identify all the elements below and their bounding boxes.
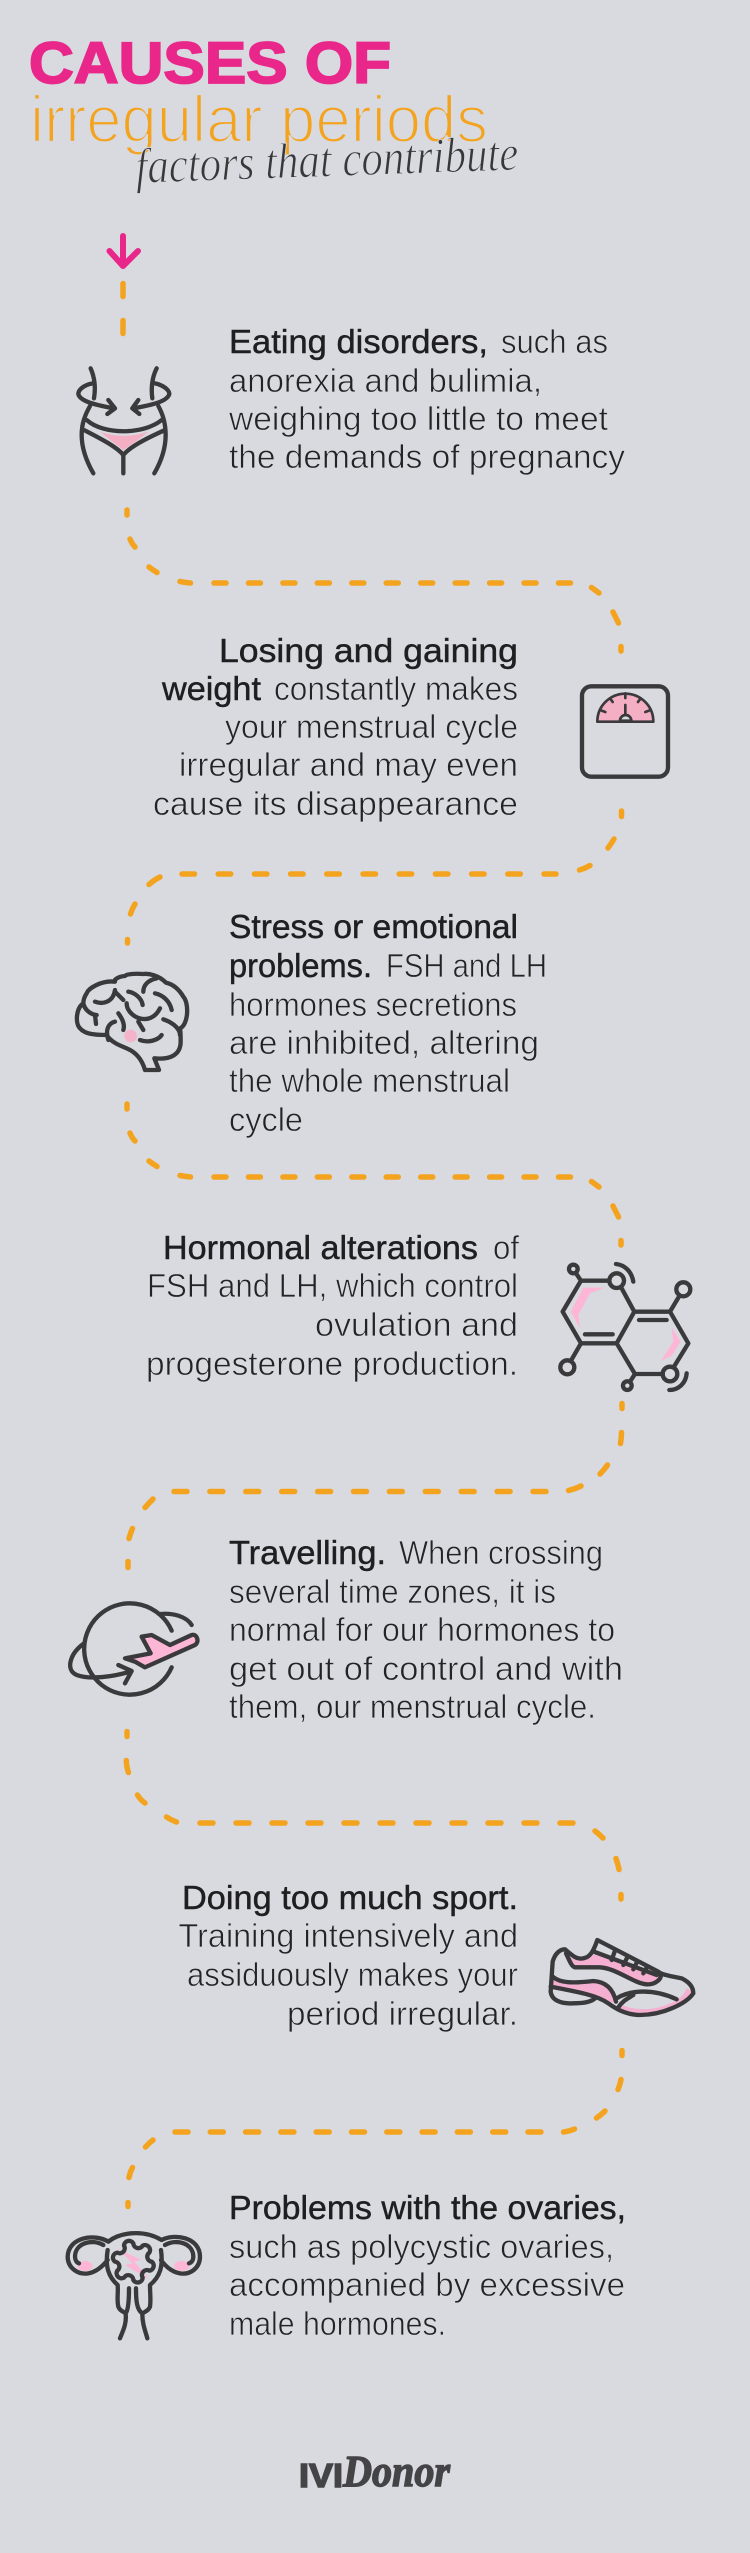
text block: hormonal alterations: of <box>493 1229 520 1266</box>
text block: travelling <box>229 1534 623 1725</box>
text block: stress or emotional problems <box>229 908 547 1138</box>
icon: brain <box>77 974 187 1070</box>
text block: doing too much sport: period irregular. <box>287 1995 518 2032</box>
text block: doing too much sport: Training intensively and <box>178 1917 518 1954</box>
heading: irregular periods: irregular periods <box>30 82 488 156</box>
icon: waist measurement <box>78 368 169 473</box>
text block: eating disorders: weighing too little to meet <box>228 400 608 437</box>
text block: problems with the ovaries: such as polycystic ovaries, <box>229 2228 614 2265</box>
text block: losing and gaining weight: cause its disappearance <box>153 785 518 822</box>
text block: travelling: When crossing <box>399 1534 603 1571</box>
icon: hormone molecule <box>560 1264 690 1390</box>
logo: IVI Donor: IVI <box>299 2457 343 2494</box>
text block: losing and gaining weight: irregular and may even <box>179 746 518 783</box>
text block: stress or emotional problems: cycle <box>229 1101 303 1138</box>
text block: eating disorders: Eating disorders, <box>229 323 488 360</box>
logo: IVI Donor: Donor <box>342 2447 451 2496</box>
text block: stress or emotional problems: problems. <box>229 947 372 984</box>
text block: problems with the ovaries: male hormones. <box>229 2305 446 2342</box>
text block: travelling: several time zones, it is <box>229 1573 556 1610</box>
text block: travelling: normal for our hormones to <box>229 1611 615 1648</box>
icon: running shoe <box>551 1940 693 2015</box>
text block: hormonal alterations <box>146 1229 520 1382</box>
text block: doing too much sport: Doing too much sport. <box>182 1879 518 1916</box>
text block: stress or emotional problems: FSH and LH <box>386 947 547 984</box>
title block <box>29 31 519 194</box>
logo: IVI Donor <box>299 2447 451 2496</box>
icon: bathroom scale <box>582 686 668 777</box>
text block: eating disorders: the demands of pregnancy <box>229 438 626 475</box>
text block: eating disorders: such as <box>501 323 608 360</box>
text block: problems with the ovaries <box>229 2189 626 2342</box>
arrow: start pointer <box>110 236 138 266</box>
text block: losing and gaining weight: weight <box>161 670 261 707</box>
text block: hormonal alterations: ovulation and <box>315 1306 518 1343</box>
dashed path: connector 2 <box>128 811 622 943</box>
text block: losing and gaining weight: Losing and gaining <box>219 632 518 669</box>
subtitle: factors that contribute: factors that contribute <box>134 125 519 194</box>
text block: losing and gaining weight: your menstrual cycle <box>225 708 518 745</box>
icon: plane around globe <box>70 1603 197 1695</box>
text block: hormonal alterations: progesterone production. <box>146 1345 518 1382</box>
dashed path: connector 4 <box>128 1404 622 1568</box>
text block: travelling: them, our menstrual cycle. <box>229 1688 596 1725</box>
dashed path: connector 6 <box>128 2050 622 2206</box>
dashed path: top segment <box>120 284 126 334</box>
text block: travelling: Travelling. <box>229 1534 386 1571</box>
heading: causes of: CAUSES OF <box>29 31 391 96</box>
text block: losing and gaining weight <box>153 632 518 822</box>
text block: losing and gaining weight: constantly makes <box>274 670 518 707</box>
text block: stress or emotional problems: the whole menstrual <box>229 1062 510 1099</box>
text block: eating disorders: anorexia and bulimia, <box>229 362 542 399</box>
text block: stress or emotional problems: hormones secretions <box>229 986 517 1023</box>
text block: eating disorders <box>228 323 626 475</box>
text block: problems with the ovaries: Problems with the ovaries, <box>229 2189 626 2226</box>
text block: doing too much sport: assiduously makes your <box>187 1956 518 1993</box>
text block: hormonal alterations: Hormonal alterations <box>163 1229 478 1266</box>
text block: stress or emotional problems: are inhibited, altering <box>229 1024 539 1061</box>
text block: stress or emotional problems: Stress or emotional <box>229 908 518 945</box>
dashed path: connector 5 <box>126 1732 621 1899</box>
text block: hormonal alterations: FSH and LH, which control <box>147 1267 518 1304</box>
icon: uterus and ovaries <box>68 2233 200 2338</box>
text block: problems with the ovaries: accompanied by excessive <box>229 2266 625 2303</box>
text block: doing too much sport <box>178 1879 518 2032</box>
text block: travelling: get out of control and with <box>229 1650 623 1687</box>
dashed path: connector 3 <box>127 1104 621 1245</box>
dashed path: connector 1 <box>127 510 621 651</box>
